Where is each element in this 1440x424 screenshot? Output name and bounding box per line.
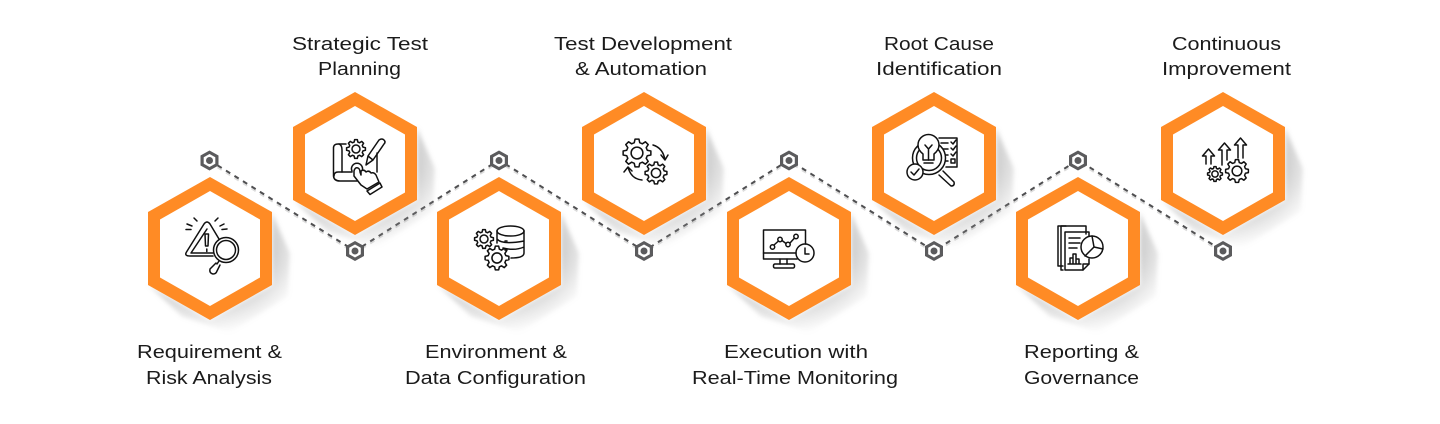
node 2 [346, 241, 364, 261]
hexagon shadow [437, 212, 579, 332]
hexagon inner [594, 106, 694, 221]
orange hexagon [727, 177, 851, 320]
step 7: Reporting & Governance [1016, 177, 1158, 388]
hexagon shadow [727, 212, 869, 332]
label: Requirement & [137, 342, 282, 362]
label: Environment & [425, 342, 567, 362]
step 3: Environment & Data Configuration [405, 177, 586, 388]
orange hexagon [148, 177, 272, 320]
label [1162, 34, 1291, 79]
label [137, 342, 282, 388]
step 2: Strategic Test Planning [292, 34, 435, 248]
label: Real-Time Monitoring [692, 368, 898, 388]
hexagon shadow [582, 127, 724, 248]
hexagon shadow [293, 127, 435, 248]
step 1: Requirement & Risk Analysis [137, 177, 290, 388]
icon: gears with cycle arrows [623, 139, 668, 184]
label [692, 342, 898, 388]
label: Test Development [554, 34, 732, 54]
step 8: Continuous Improvement [1161, 34, 1303, 248]
hexagon shadow [148, 212, 290, 332]
node 8 [1214, 241, 1232, 261]
orange hexagon [293, 92, 417, 235]
icon: bulb, magnifier, checklist [907, 134, 957, 186]
hexagon inner [1028, 191, 1128, 306]
node 7 [1069, 150, 1087, 170]
dashed connector path [209, 160, 1223, 253]
icon: rising arrows and gears [1202, 138, 1248, 182]
node 6 [925, 241, 943, 261]
label: Governance [1024, 368, 1139, 388]
label: Data Configuration [405, 368, 586, 388]
label: Identification [876, 59, 1002, 79]
hexagon inner [305, 106, 405, 221]
step 4: Test Development & Automation [554, 34, 732, 248]
label: Continuous [1172, 34, 1281, 54]
label [554, 34, 732, 79]
label: Execution with [724, 342, 868, 362]
orange hexagon [582, 92, 706, 235]
hexagon inner [160, 191, 260, 306]
hexagon inner [1173, 106, 1273, 221]
label [292, 34, 428, 79]
orange hexagon [437, 177, 561, 320]
orange hexagon [872, 92, 996, 235]
hexagon shadow [872, 127, 1014, 248]
orange hexagon [1016, 177, 1140, 320]
hexagon shadow [1016, 212, 1158, 332]
label: Strategic Test [292, 34, 428, 54]
label: Risk Analysis [146, 368, 272, 388]
icon: warning triangle and magnifier [186, 218, 238, 274]
hexagon inner [449, 191, 549, 306]
icon: report pages and pie chart [1058, 226, 1103, 270]
label: Reporting & [1024, 342, 1139, 362]
orange hexagon [1161, 92, 1285, 235]
node 3 [490, 150, 508, 170]
step 6: Root Cause Identification [872, 34, 1014, 248]
hexagon shadow [1161, 127, 1303, 248]
label: Improvement [1162, 59, 1291, 79]
node 5 [780, 150, 798, 170]
hexagon inner [884, 106, 984, 221]
hexagon inner [739, 191, 839, 306]
node 4 [635, 241, 653, 261]
label: & Automation [575, 59, 707, 79]
icon: plan, gear, pencil and hand [333, 139, 385, 194]
label [405, 342, 586, 388]
label [1024, 342, 1139, 388]
connector nodes [200, 150, 1232, 261]
node 1 [200, 150, 218, 170]
icon: gears and database [475, 226, 524, 270]
label: Planning [318, 59, 401, 79]
icon: monitor with chart and clock [764, 230, 814, 268]
label: Root Cause [884, 34, 994, 54]
label [876, 34, 1002, 79]
step 5: Execution with Real-Time Monitoring [692, 177, 898, 388]
